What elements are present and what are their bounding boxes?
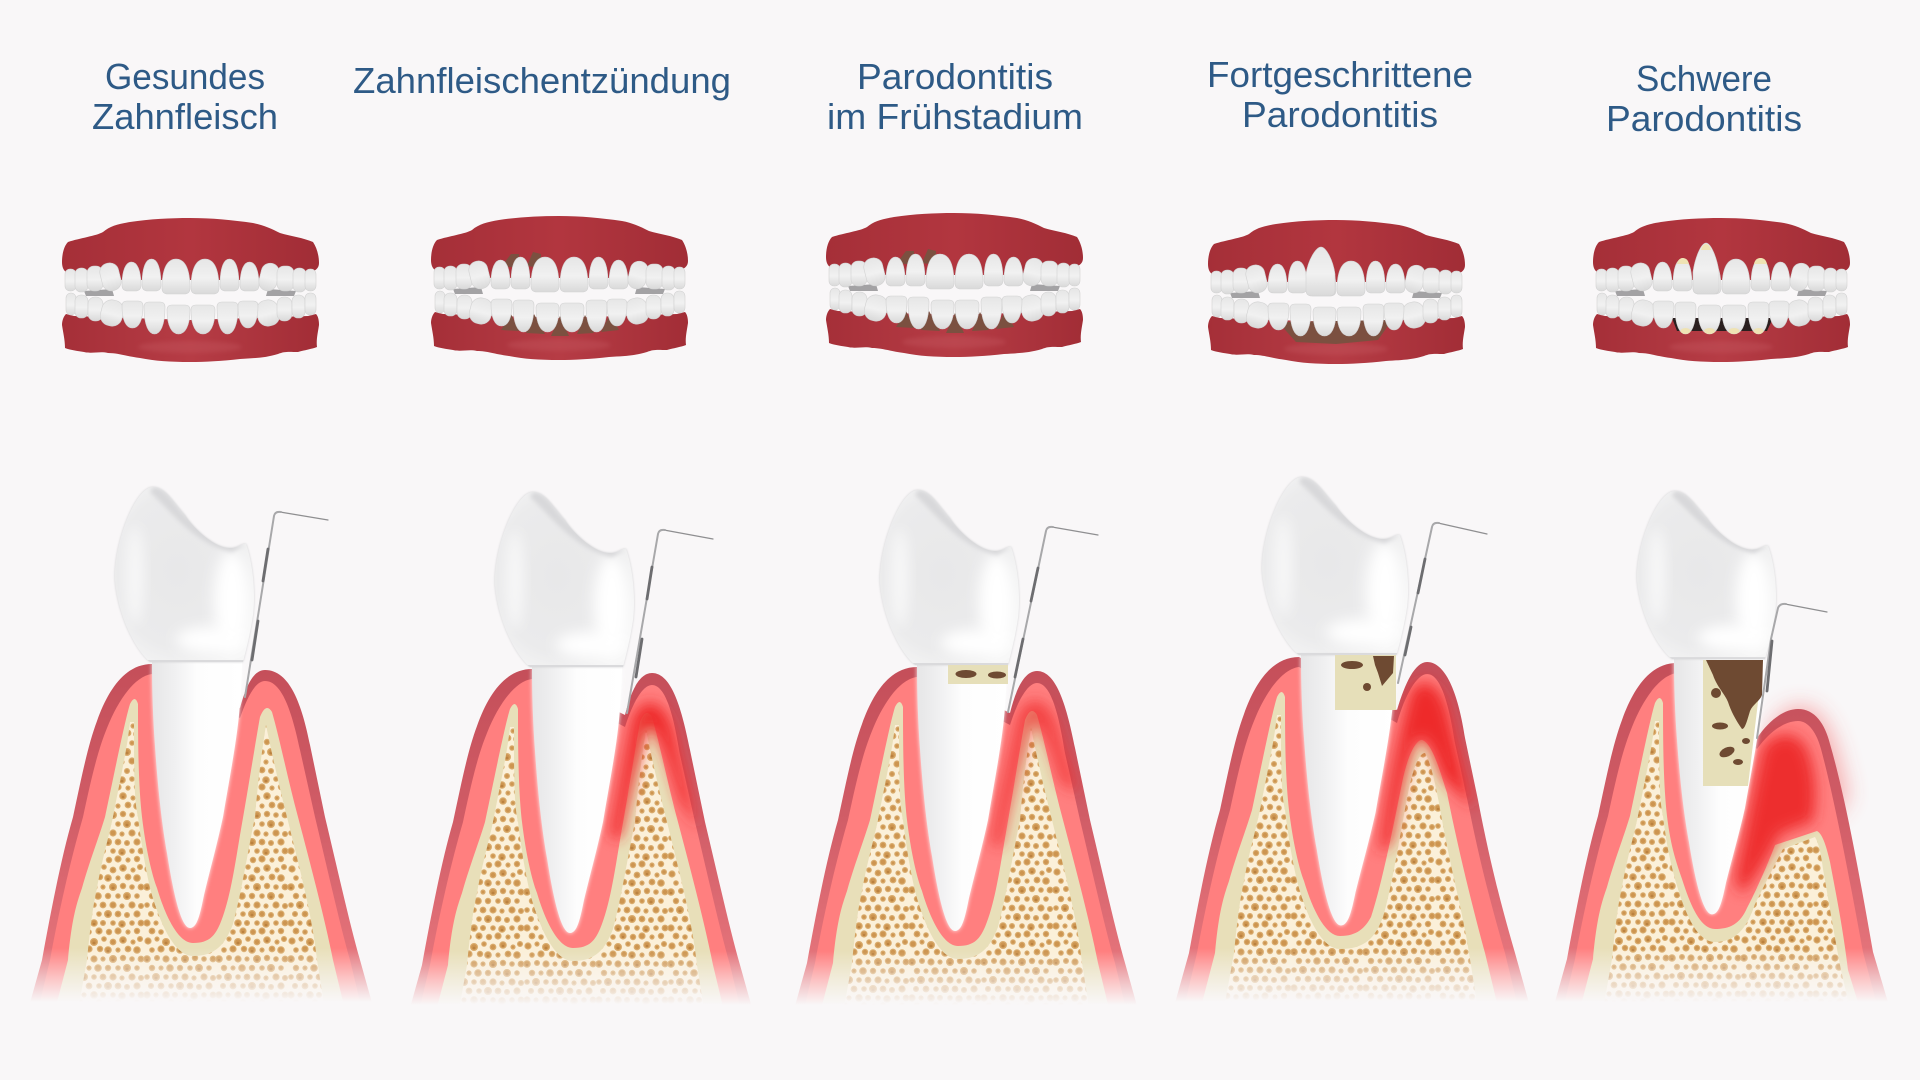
title: Schwere Parodontitis: Parodontitis (1606, 98, 1802, 139)
tooth (495, 492, 634, 933)
bone (1202, 692, 1497, 1003)
periodontal probe (1398, 523, 1487, 683)
tartar on root (948, 665, 1008, 684)
bottom fade (780, 951, 1155, 1026)
tooth (1637, 491, 1776, 914)
inflammation (991, 701, 1079, 848)
title: Fortgeschrittene Parodontitis: Parodontitis (1242, 94, 1438, 135)
title: Parodontitis im Frühstadium: im Frühstadium (827, 96, 1083, 137)
panel: healthy gum cross-section (15, 487, 390, 1023)
bone (55, 699, 345, 1010)
gum (793, 667, 1139, 1013)
teeth illustration: gingivitis (431, 216, 688, 360)
panel: severe periodontitis cross-section (1556, 490, 1886, 998)
bone (1580, 698, 1860, 1009)
bottom fade (395, 951, 770, 1026)
panel: advanced periodontitis cross-section (1176, 476, 1528, 999)
periodontal probe (627, 530, 713, 713)
tartar on root (1703, 660, 1763, 786)
tooth (115, 487, 254, 928)
gum (1553, 663, 1890, 1009)
title: Gesundes Zahnfleisch: Gesundes (105, 56, 265, 97)
panel: gingivitis cross-section (412, 491, 750, 1002)
title: Schwere Parodontitis: Schwere (1636, 58, 1772, 99)
bottom fade (1162, 948, 1547, 1023)
title: Gesundes Zahnfleisch: Zahnfleisch (92, 96, 278, 137)
bone (820, 702, 1110, 1013)
inflammation halo (1765, 707, 1847, 829)
bone (435, 704, 725, 1015)
title: Parodontitis im Frühstadium: Parodontitis (857, 56, 1053, 97)
gum (408, 669, 754, 1015)
tooth (880, 490, 1019, 931)
teeth illustration: advanced periodontitis (1208, 220, 1465, 364)
tooth (1262, 477, 1408, 925)
teeth illustration: healthy (62, 218, 319, 362)
periodontal probe (1008, 527, 1098, 712)
tartar on root (1335, 655, 1396, 710)
title: Zahnfleischentzündung: Zahnfleischentzündung (353, 60, 731, 101)
periodontal probe (1757, 604, 1827, 738)
inflammation (1735, 734, 1815, 894)
inflammation (1379, 682, 1473, 853)
bottom fade (1540, 948, 1915, 1023)
title: Fortgeschrittene Parodontitis: Fortgeschrittene (1207, 54, 1473, 95)
panel: early periodontitis cross-section (796, 489, 1136, 1002)
teeth illustration: early periodontitis (826, 213, 1083, 357)
periodontal probe (245, 512, 328, 697)
gum (28, 664, 374, 1010)
bottom fade (15, 948, 390, 1023)
teeth illustration: severe periodontitis (1593, 218, 1850, 362)
gum (1175, 657, 1529, 1003)
inflammation (610, 703, 698, 840)
